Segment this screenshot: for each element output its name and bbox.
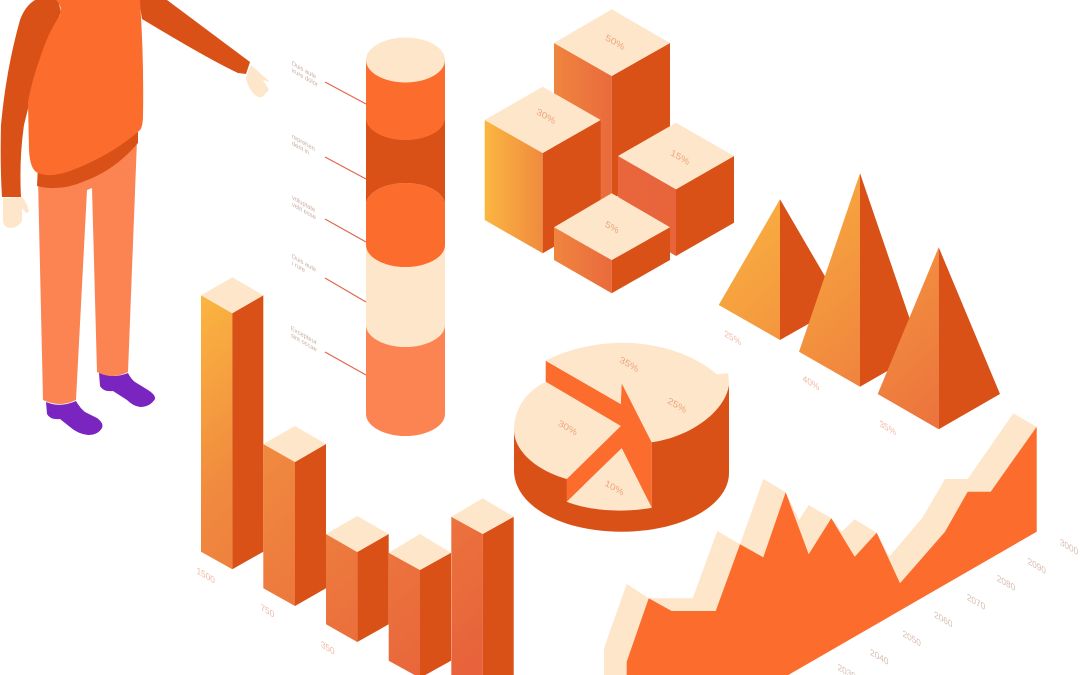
bar 1500 bbox=[201, 277, 263, 569]
label 10%: 10% bbox=[603, 478, 625, 499]
bar label 1500: 1500 bbox=[197, 565, 215, 587]
label 30%: 30% bbox=[557, 418, 579, 439]
leader line 1 bbox=[325, 82, 366, 104]
leader line 5 bbox=[325, 352, 366, 375]
slice 30% bbox=[514, 382, 621, 479]
label 35%: 35% bbox=[618, 355, 640, 375]
cylinder top bbox=[366, 38, 445, 82]
label 5: Excepteur bbox=[291, 325, 317, 347]
sweater bbox=[28, 0, 143, 175]
isometric area chart bbox=[604, 413, 1078, 675]
label 1: Duis aute bbox=[292, 60, 316, 81]
year 2040: 2040 bbox=[870, 647, 888, 668]
label 4: Duis aute bbox=[292, 253, 316, 274]
pie body bbox=[514, 385, 729, 532]
bar label 350: 350 bbox=[321, 639, 335, 658]
isometric cubes chart bbox=[485, 9, 734, 293]
label 3: voluptate bbox=[292, 194, 315, 215]
segment: cream bbox=[366, 245, 445, 347]
pyramids chart bbox=[719, 173, 1000, 439]
year 2060: 2060 bbox=[934, 609, 952, 631]
segment: salmon bbox=[366, 325, 445, 436]
pointing arm bbox=[139, 0, 270, 97]
bar label 750: 750 bbox=[260, 602, 274, 621]
cube 5% bbox=[554, 193, 670, 293]
cube 30%: 30% bbox=[535, 107, 557, 127]
inner orange walls bbox=[546, 361, 652, 508]
pyramid label 25%: 25% bbox=[724, 328, 741, 349]
hem bbox=[37, 130, 138, 188]
hanging arm bbox=[1, 0, 61, 228]
area front bbox=[627, 427, 1037, 675]
slice 10% bbox=[567, 448, 652, 511]
exploded pie chart bbox=[514, 343, 729, 532]
label 25%: 25% bbox=[666, 396, 688, 416]
pyramid 35% bbox=[878, 247, 1000, 429]
label 2: derit in bbox=[292, 140, 309, 157]
bar 5 bbox=[451, 498, 514, 675]
label 1: irure dolor bbox=[292, 67, 318, 89]
pyramid label 35%: 35% bbox=[879, 418, 896, 439]
year 2080: 2080 bbox=[997, 573, 1015, 594]
pyramid 25% bbox=[719, 199, 842, 340]
year 2070: 2070 bbox=[967, 592, 985, 613]
label 2: reprehen bbox=[292, 133, 315, 153]
bar 350 bbox=[326, 516, 389, 642]
cube 5%: 5% bbox=[603, 219, 620, 237]
leader line 4 bbox=[325, 278, 366, 302]
label 3: velit esse bbox=[292, 201, 316, 222]
cube 50% bbox=[554, 9, 670, 205]
area back edge bbox=[604, 413, 1037, 675]
cube 15% bbox=[618, 123, 734, 256]
pyramid 40% bbox=[799, 173, 921, 387]
segment: dark bbox=[366, 118, 445, 205]
segment: top orange bbox=[366, 60, 445, 140]
year 2050: 2050 bbox=[903, 628, 921, 650]
leader line 3 bbox=[325, 219, 366, 242]
cube 30% bbox=[485, 87, 601, 253]
bar 750 bbox=[263, 426, 326, 606]
label 5: sint occae bbox=[291, 332, 317, 354]
bar 4 bbox=[389, 534, 451, 675]
leader line 2 bbox=[325, 157, 366, 179]
purple shoes bbox=[46, 373, 155, 435]
trousers bbox=[38, 140, 137, 404]
pyramid label 40%: 40% bbox=[803, 373, 820, 394]
label 4: i rure bbox=[292, 260, 305, 275]
year 2090: 2090 bbox=[1028, 556, 1046, 577]
cylinder stacked chart bbox=[291, 38, 445, 436]
person pointing at charts bbox=[1, 0, 270, 435]
cube 15%: 15% bbox=[669, 148, 691, 168]
segment: orange disc bbox=[366, 183, 445, 267]
slices 35% and 25% bbox=[546, 343, 729, 442]
year 3000: 3000 bbox=[1060, 537, 1078, 558]
cube 50%: 50% bbox=[604, 33, 626, 53]
isometric bar chart bbox=[197, 277, 514, 675]
